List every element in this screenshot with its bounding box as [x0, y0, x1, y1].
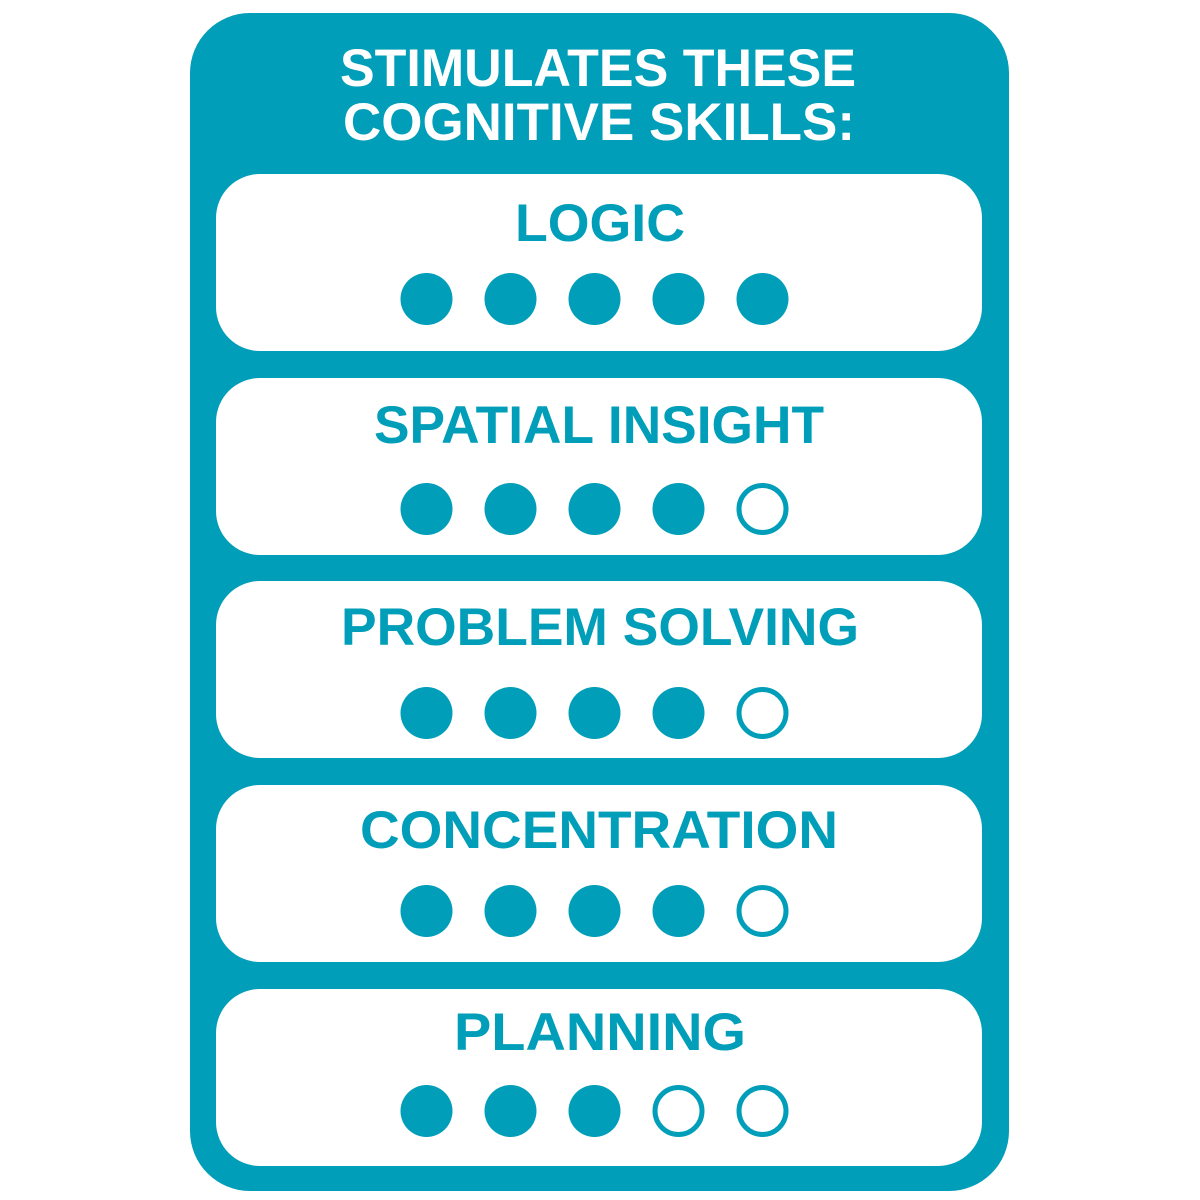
- panel: concentration: [216, 785, 982, 962]
- rating: 5 of 5: [400, 273, 788, 325]
- heading: logic: LOGIC: [515, 194, 685, 253]
- title: COGNITIVE SKILLS:: [343, 93, 855, 152]
- panel: problem solving: [216, 581, 982, 758]
- panel: planning: [216, 989, 982, 1166]
- rating: 3 of 5: [400, 1085, 786, 1137]
- heading: spatial insight: SPATIAL INSIGHT: [374, 396, 824, 455]
- panel: spatial insight: [216, 378, 982, 555]
- title: STIMULATES THESE: [340, 39, 856, 98]
- heading: concentration: CONCENTRATION: [360, 801, 838, 860]
- panel: logic: [216, 174, 982, 351]
- rating: 4 of 5: [400, 483, 786, 535]
- rating: 4 of 5: [400, 687, 786, 739]
- rating: 4 of 5: [400, 885, 786, 937]
- title: [340, 39, 856, 152]
- heading: planning: PLANNING: [454, 1003, 746, 1062]
- panel: teal card background: [190, 13, 1009, 1191]
- heading: problem solving: PROBLEM SOLVING: [341, 598, 859, 657]
